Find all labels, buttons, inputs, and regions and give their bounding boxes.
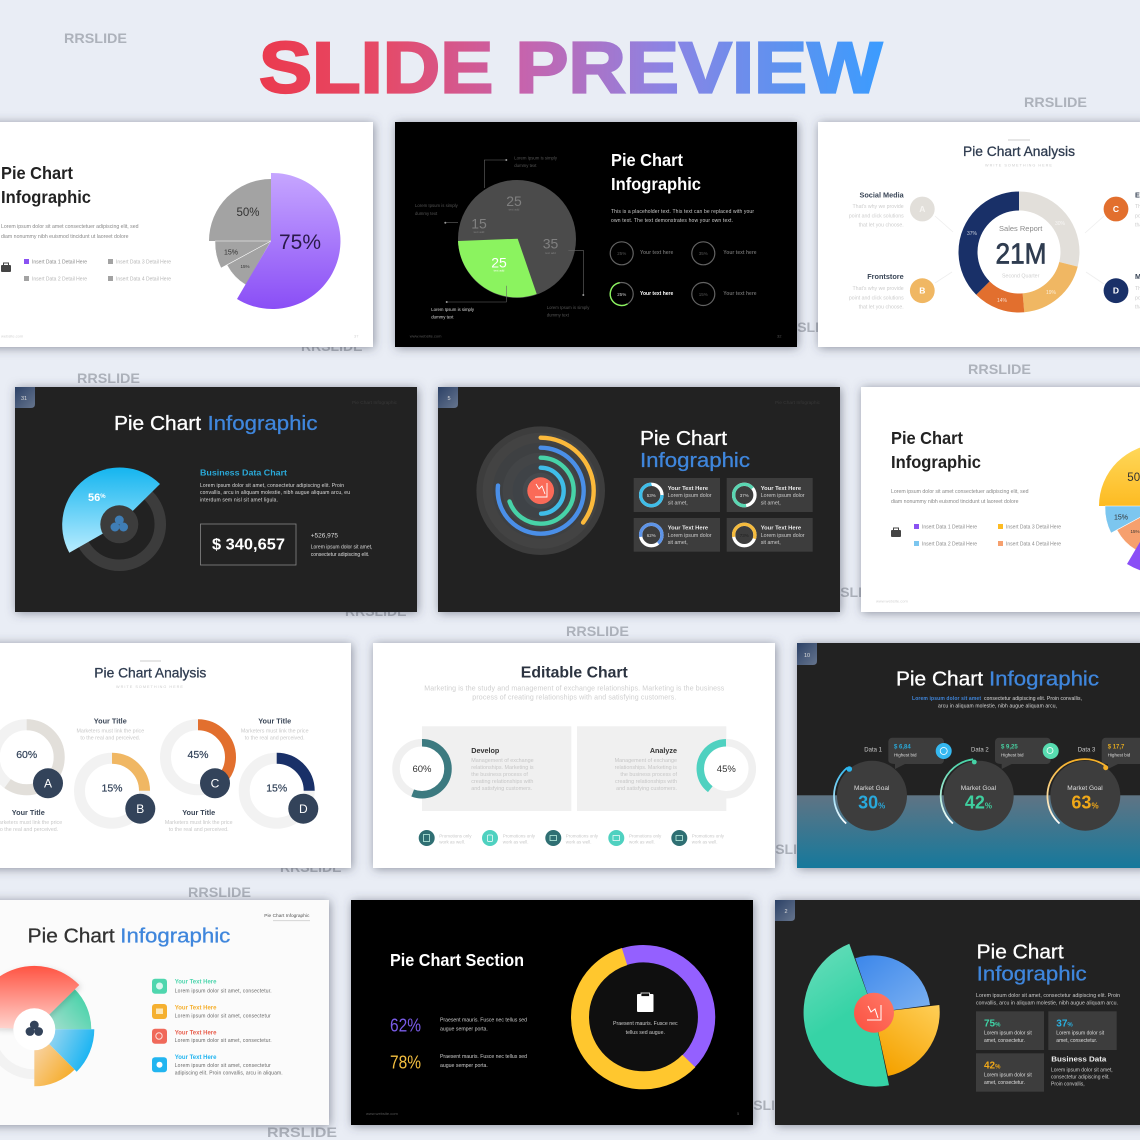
watermarks: RRSLIDE (777, 319, 838, 335)
watermarks: RRSLIDE (1024, 94, 1087, 110)
ring labels: Your text here (723, 250, 757, 256)
business data text: consectetur adipiscing elit. (1051, 1075, 1110, 1081)
pie chart: 15% (1130, 529, 1140, 534)
callout texts: dummy text (514, 163, 537, 168)
stat cards: 62% (647, 533, 656, 538)
icon captions: Promotions only (503, 833, 536, 838)
card text: analyze: relationships. Marketing is (615, 765, 677, 771)
ring: 45 percent: 45% (717, 764, 736, 775)
tag text: Pie Chart Infographic (264, 913, 310, 919)
card text: analyze: Analyze (650, 746, 677, 755)
heading: Pie Chart Analysis (94, 665, 206, 681)
stat cards: Your Text Here (668, 486, 709, 492)
icon captions: Promotions only (439, 833, 472, 838)
callout texts: dummy text (547, 313, 570, 318)
callout texts: dummy text (415, 211, 438, 216)
pie chart (458, 180, 576, 298)
heading: Infographic (640, 450, 750, 472)
panel: radial bars slide (438, 387, 840, 612)
legend: Insert Data 3 Detail Here (116, 260, 171, 266)
pie chart: text add (509, 208, 520, 212)
legend: Insert Data 3 Detail Here (1006, 525, 1061, 531)
pie chart: text add (494, 268, 505, 272)
tag text: Pie Chart Infographic (352, 400, 398, 406)
gauge: 42 percent: Data 2 (971, 748, 989, 754)
heading: Pie Chart (114, 413, 201, 435)
ring values: 45% (187, 749, 209, 761)
progress rings (606, 242, 715, 310)
panel: market goal slide (797, 643, 1140, 868)
title: SLIDE PREVIEW (259, 28, 883, 109)
heading: Pie Chart (891, 428, 963, 448)
card text: develop: creating relationships with (471, 779, 533, 785)
side texts (849, 190, 905, 310)
badges: C (211, 776, 220, 790)
stat cards: Lorem ipsum dolor (668, 493, 712, 499)
heading: WRITE SOMETHING HERE (985, 164, 1053, 168)
stat: 78 percent: Praesent mauris. Fusce nec tellus sed (440, 1054, 527, 1060)
donut centre: Sales Report (999, 224, 1043, 233)
watermarks: RRSLIDE (267, 1124, 337, 1140)
tag text (264, 913, 310, 921)
ring captions: Your Title (258, 716, 291, 726)
stat cards: Your Text Here (761, 486, 802, 492)
side texts: that let you choose. (859, 223, 904, 229)
list: Your Text Here (175, 1030, 217, 1036)
donut chart: Praesent mauris. Fusce nec (613, 1021, 678, 1027)
icon captions: work as well. (503, 840, 528, 844)
stat cards: Your Text Here (668, 526, 709, 532)
number tag: 31 (21, 396, 27, 402)
bottom band (797, 795, 1140, 868)
card text: develop: relationships. Marketing is (471, 765, 534, 771)
heading: WRITE SOMETHING HERE (116, 685, 184, 689)
ring values: 15% (101, 782, 123, 794)
donut labels: 37% (967, 231, 978, 237)
text block: Lorem ipsum dolor sit amet consectetuer adipiscing elit, sed (1, 224, 139, 230)
card text: analyze: the business process of (620, 772, 677, 778)
watermarks: RRSLIDE (755, 841, 816, 857)
gauge: 63 percent (1047, 738, 1140, 831)
number tag (438, 387, 458, 408)
gauge: 30 percent: $ 6,84 (894, 744, 911, 750)
card text: analyze: Management of exchange (615, 758, 677, 764)
heading: Editable Chart (521, 664, 628, 681)
value box: $ 340,657 (212, 536, 285, 554)
donut centre: Second Quarter (1002, 274, 1040, 280)
badges (910, 197, 1128, 303)
tag text: Pie Chart Infographic (775, 400, 821, 406)
stat: 78 percent (390, 1052, 527, 1072)
stat cards: sit amet, (761, 540, 781, 546)
fan chart: 56 (88, 492, 100, 504)
list: Your Text Here (175, 1055, 217, 1061)
heading: Infographic (120, 926, 230, 948)
watermarks: RRSLIDE (280, 859, 341, 875)
ring labels: Your text here (640, 291, 673, 297)
card text: develop: the business process of (471, 772, 528, 778)
side texts: Frontstore (867, 272, 904, 281)
side texts: That's why we provide (853, 286, 904, 292)
ring captions: to the real and perceived. (0, 827, 58, 833)
watermarks: RRSLIDE (566, 623, 629, 639)
ring: 60 percent: 60% (412, 764, 432, 775)
gauge: 30 percent: Data 1 (864, 748, 883, 754)
stat cards: Your Text Here (761, 526, 802, 532)
watermarks: RRSLIDE (77, 370, 140, 386)
ring captions: Marketers must link the price (241, 728, 309, 734)
gauge: 30 percent: 30% (858, 793, 885, 813)
ring labels: Your text here (723, 291, 757, 297)
pie chart: 25 (491, 254, 507, 270)
heading: Pie Chart (640, 428, 727, 450)
radial chart (476, 426, 605, 555)
icon: briefcase (891, 528, 901, 537)
callout texts (415, 156, 590, 320)
heading: Pie Chart Analysis (963, 144, 1075, 160)
panel: segmented pie slide (0, 900, 329, 1125)
donut chart (554, 927, 733, 1107)
stat cards (634, 478, 813, 552)
text block: Lorem ipsum dolor sit amet consectetuer adipiscing elit, sed (891, 489, 1029, 495)
gauge: 30 percent: Market Goal (854, 785, 890, 792)
donut labels: 19% (1046, 290, 1057, 296)
panel: business data slide: Lorem ipsum dolor sit amet, consectetur adipiscing elit. Proin (200, 483, 344, 489)
pie chart: 50% (236, 207, 260, 219)
side texts: point and click solutions (849, 214, 904, 220)
list: Lorem ipsum dolor sit amet, consectetur. (175, 1038, 272, 1044)
badges: B (919, 286, 925, 296)
stat: 78 percent: augue semper porta. (440, 1063, 488, 1069)
number tag: 2 (784, 909, 788, 915)
heading: Infographic (891, 452, 981, 472)
progress rings: 25% (617, 251, 626, 256)
icon captions: work as well. (629, 840, 655, 844)
icon row (419, 830, 687, 846)
stat cards: amet, consectetur. (1056, 1038, 1097, 1044)
callout texts: Lorem Ipsum is simply (547, 305, 590, 310)
badges: A (44, 776, 52, 790)
heading: Infographic (977, 964, 1087, 986)
legend: Insert Data 4 Detail Here (116, 276, 171, 282)
panel: four rings slide (0, 643, 351, 868)
gauge: 63 percent: 63% (1071, 793, 1099, 813)
list: Lorem ipsum dolor sit amet, consectetur. (175, 988, 272, 994)
list: Lorem ipsum dolor sit amet, consectetur (175, 1013, 271, 1019)
watermarks: RRSLIDE (188, 884, 251, 900)
footer: 37 (354, 334, 359, 338)
footer: www.website.com (876, 598, 908, 604)
stat cards: amet, consectetur. (984, 1038, 1025, 1044)
heading: Pie Chart (896, 669, 983, 691)
ring captions: to the real and perceived. (245, 735, 305, 741)
side text: +526,975 (311, 533, 338, 540)
list (152, 979, 283, 1076)
stat cards: 73% (740, 533, 749, 538)
gauge: 63 percent: Data 3 (1078, 748, 1096, 754)
text block: Business Data Chart (200, 469, 287, 478)
icon captions: Promotions only (566, 833, 599, 838)
text block: Lorem ipsum dolor sit amet, consectetur adipiscing elit. Proin (976, 993, 1120, 999)
pie chart: 25 (506, 193, 522, 209)
info cards (422, 726, 726, 811)
right side texts (1135, 190, 1140, 310)
pie chart (209, 173, 340, 309)
icon captions: work as well. (439, 840, 465, 844)
legend (24, 259, 171, 282)
value box (200, 524, 296, 565)
heading: Pie Chart Section (390, 950, 524, 970)
panel: business data slide: interdum sem nisl sit amet ligula. (200, 497, 278, 503)
stat cards: sit amet, (761, 500, 781, 506)
subtitle: consectetur adipiscing elit. Proin convallis, (984, 696, 1082, 702)
stat cards: 53% (647, 493, 656, 498)
text block: own text. The text demonstrates how your own text. (611, 218, 733, 224)
panel: business data slide: convallis, arcu in aliquam molestie, nibh augue aliquam arcu, eu (200, 490, 350, 496)
pie chart: text add (545, 251, 556, 255)
donut chart: tellus sed augue. (626, 1030, 665, 1036)
gauge: 30 percent (834, 738, 952, 831)
list: Lorem ipsum dolor sit amet, consectetur (175, 1063, 271, 1069)
progress rings: 15% (699, 292, 708, 297)
stat: 62 percent: 62% (390, 1016, 421, 1036)
number tag (775, 900, 795, 921)
callout texts: dummy text (431, 315, 454, 320)
gauge: 63 percent: Highest bid (1108, 752, 1131, 758)
watermarks: RRSLIDE (64, 30, 127, 46)
side text: Lorem ipsum dolor sit amet, (311, 544, 372, 550)
ring captions: to the real and perceived. (80, 735, 140, 741)
ring captions (0, 716, 309, 833)
ring captions: Your Title (94, 716, 127, 726)
ring captions: Your Title (12, 808, 45, 817)
stat cards: Lorem ipsum dolor (761, 533, 805, 539)
ring labels: Your text here (640, 250, 673, 256)
number tag (15, 387, 35, 408)
stat cards: Lorem ipsum dolor sit (1056, 1031, 1105, 1037)
pie chart: text add (474, 230, 485, 234)
footer: 32 (777, 334, 782, 338)
legend (914, 524, 1061, 548)
icon captions: work as well. (566, 840, 591, 844)
text block: convallis, arcu in aliquam molestie, nibh augue aliquam arcu. (976, 1000, 1118, 1006)
card text: develop: and satisfying customers. (471, 786, 532, 792)
icon: clipboard (637, 993, 654, 1012)
legend: Insert Data 1 Detail Here (922, 525, 977, 531)
stat cards: 42% (984, 1061, 1001, 1072)
legend: Insert Data 2 Detail Here (922, 542, 977, 548)
fan chart (62, 468, 160, 565)
icon captions (439, 833, 725, 844)
stat cards: amet, consectetur. (984, 1080, 1025, 1086)
ring: 60 percent (396, 743, 448, 795)
heading: Infographic (989, 669, 1099, 691)
stat cards: 37% (740, 493, 749, 498)
footer: 5 (737, 1111, 740, 1116)
card text: analyze: creating relationships with (615, 779, 677, 785)
badges: C (1113, 204, 1119, 214)
watermarks: RRSLIDE (968, 361, 1031, 377)
donut centre: 21M (996, 238, 1046, 270)
number tag: 10 (804, 653, 810, 659)
pie chart (1099, 444, 1140, 574)
heading: Infographic (208, 413, 318, 435)
callout lines (445, 160, 583, 302)
legend: Insert Data 4 Detail Here (1006, 542, 1061, 548)
gauge: 42 percent (941, 738, 1059, 831)
panel: business data slide (15, 387, 417, 612)
pie chart: 75% (279, 231, 321, 254)
stat: 78 percent: 78% (390, 1052, 421, 1072)
callout texts: Lorem Ipsum is simply (415, 203, 459, 208)
card text: analyze: and satisfying customers. (616, 786, 677, 792)
gauge: 63 percent: $ 17,7 (1108, 744, 1125, 750)
donut labels (967, 221, 1066, 304)
text block: diam nonummy nibh euismod tincidunt ut laoreet dolore (891, 499, 1019, 505)
text block: diam nonummy nibh euismod tincidunt ut laoreet dolore (1, 234, 129, 240)
footer: www.website.com (366, 1111, 398, 1116)
list: Your Text Here (175, 980, 217, 986)
ring values (16, 749, 287, 794)
number tag (797, 643, 817, 665)
card text: develop: Management of exchange (471, 758, 534, 764)
stat cards: Lorem ipsum dolor sit (984, 1073, 1032, 1079)
heading (963, 140, 1075, 168)
segmented pie (0, 966, 94, 1086)
card text: develop: Develop (471, 746, 500, 755)
legend: Insert Data 2 Detail Here (32, 276, 87, 282)
subtitle: arcu in aliquam molestie, nibh augue aliquam arcu, (938, 704, 1057, 710)
icon captions: work as well. (692, 840, 717, 844)
business data text: Lorem ipsum dolor sit amet, (1051, 1067, 1113, 1073)
watermarks: RRSLIDE (301, 338, 362, 354)
stat cards: sit amet, (668, 540, 688, 546)
gauge: 30 percent: Highest bid (894, 752, 917, 758)
donut chart (947, 180, 1091, 324)
fan chart: % (100, 494, 106, 500)
business data text: Proin convallis, (1051, 1082, 1085, 1088)
stat: 62 percent (390, 1016, 527, 1036)
list: adipiscing elit. Proin convallis, arcu in aliquam. (175, 1070, 283, 1076)
gauge: 42 percent: $ 9,25 (1001, 744, 1018, 750)
side text: consectetur adipiscing elit. (311, 552, 369, 558)
side texts: That's why we provide (853, 204, 904, 210)
intro text: process of creating relationships with and satisfying customers. (472, 695, 676, 702)
heading (94, 660, 206, 689)
footer: website.com (1, 334, 24, 338)
ring captions: Your Title (182, 808, 215, 817)
subtitle: Lorem ipsum dolor sit amet (912, 696, 981, 702)
text block: This is a placeholder text. This text can be replaced with your (611, 209, 754, 215)
side texts: that let you choose. (859, 304, 904, 310)
heading: Infographic (611, 174, 701, 194)
gauge: 42 percent: Highest bid (1001, 752, 1024, 758)
callout texts: Lorem Ipsum is simply (514, 156, 558, 160)
heading: Pie Chart (28, 926, 115, 948)
ring values: 15% (266, 782, 287, 794)
heading: Pie Chart (977, 941, 1064, 963)
intro text: Marketing is the study and management of exchange relationships. Marketing is the business (424, 686, 725, 693)
connector lines (935, 216, 1104, 284)
stat cards: 37% (1056, 1019, 1073, 1030)
gauge: 63 percent: Market Goal (1067, 785, 1103, 792)
callout texts: Lorem Ipsum is simply (431, 307, 475, 312)
ring labels (640, 250, 757, 297)
stat cards: 75% (984, 1019, 1001, 1030)
pie chart: 15% (1114, 514, 1128, 522)
gauge: 42 percent: Market Goal (961, 785, 997, 792)
side texts: point and click solutions (849, 295, 904, 301)
icon captions: Promotions only (629, 833, 662, 838)
stat cards: sit amet, (668, 500, 688, 506)
panel: pie chart section slide (351, 900, 753, 1125)
watermarks: RRSLIDE (820, 584, 881, 600)
badges (33, 768, 318, 824)
stat cards: Lorem ipsum dolor sit (984, 1031, 1032, 1037)
heading: Pie Chart (1, 163, 73, 183)
panel: business data pie slide (775, 900, 1140, 1125)
side texts: Social Media (859, 190, 905, 200)
heading: Pie Chart (611, 150, 683, 170)
ring: 45 percent (690, 732, 763, 805)
progress rings: 25% (617, 292, 626, 297)
donut labels: 30% (1055, 221, 1066, 227)
donut labels: 14% (997, 298, 1008, 304)
panel: editable chart slide (373, 643, 775, 868)
pie chart (804, 944, 940, 1087)
stat cards (976, 1011, 1117, 1092)
stat: 62 percent: Praesent mauris. Fusce nec tellus sed (440, 1017, 527, 1023)
pie chart: 15% (240, 264, 250, 269)
watermarks: RRSLIDE (345, 603, 406, 619)
progress rings: 35% (699, 251, 708, 256)
ring captions: Marketers must link the price (165, 820, 233, 826)
ring values: 60% (16, 749, 37, 761)
pie chart: 15 (471, 216, 487, 232)
list: Your Text Here (175, 1005, 217, 1011)
ring captions: Marketers must link the price (76, 728, 144, 734)
badges: B (136, 802, 144, 816)
ring captions: to the real and perceived. (169, 827, 229, 833)
badges: A (919, 204, 925, 214)
panel: purple pie chart slide (0, 122, 373, 347)
stat: 62 percent: augue semper porta. (440, 1026, 488, 1032)
badges: D (1113, 286, 1119, 296)
pie chart: 35 (543, 235, 558, 251)
panel: colourful pie slide (861, 387, 1140, 612)
donut centre (996, 224, 1046, 280)
panel: black pie slide (395, 122, 797, 347)
icon: briefcase (1, 263, 11, 272)
ring charts (0, 725, 309, 823)
icon captions: Promotions only (692, 833, 725, 838)
watermarks: RRSLIDE (733, 1097, 794, 1113)
business data text: Business Data (1051, 1057, 1106, 1064)
badges: D (299, 802, 308, 816)
footer: www.website.com (410, 334, 442, 338)
legend: Insert Data 1 Detail Here (32, 260, 87, 266)
pie chart: 15% (224, 250, 238, 256)
stat cards: Lorem ipsum dolor (761, 493, 805, 499)
number tag: 5 (447, 396, 451, 402)
panel: sales report donut slide (818, 122, 1140, 347)
gauge: 42 percent: 42% (965, 793, 992, 813)
stat cards: Lorem ipsum dolor (668, 533, 712, 539)
heading: Infographic (1, 187, 91, 207)
